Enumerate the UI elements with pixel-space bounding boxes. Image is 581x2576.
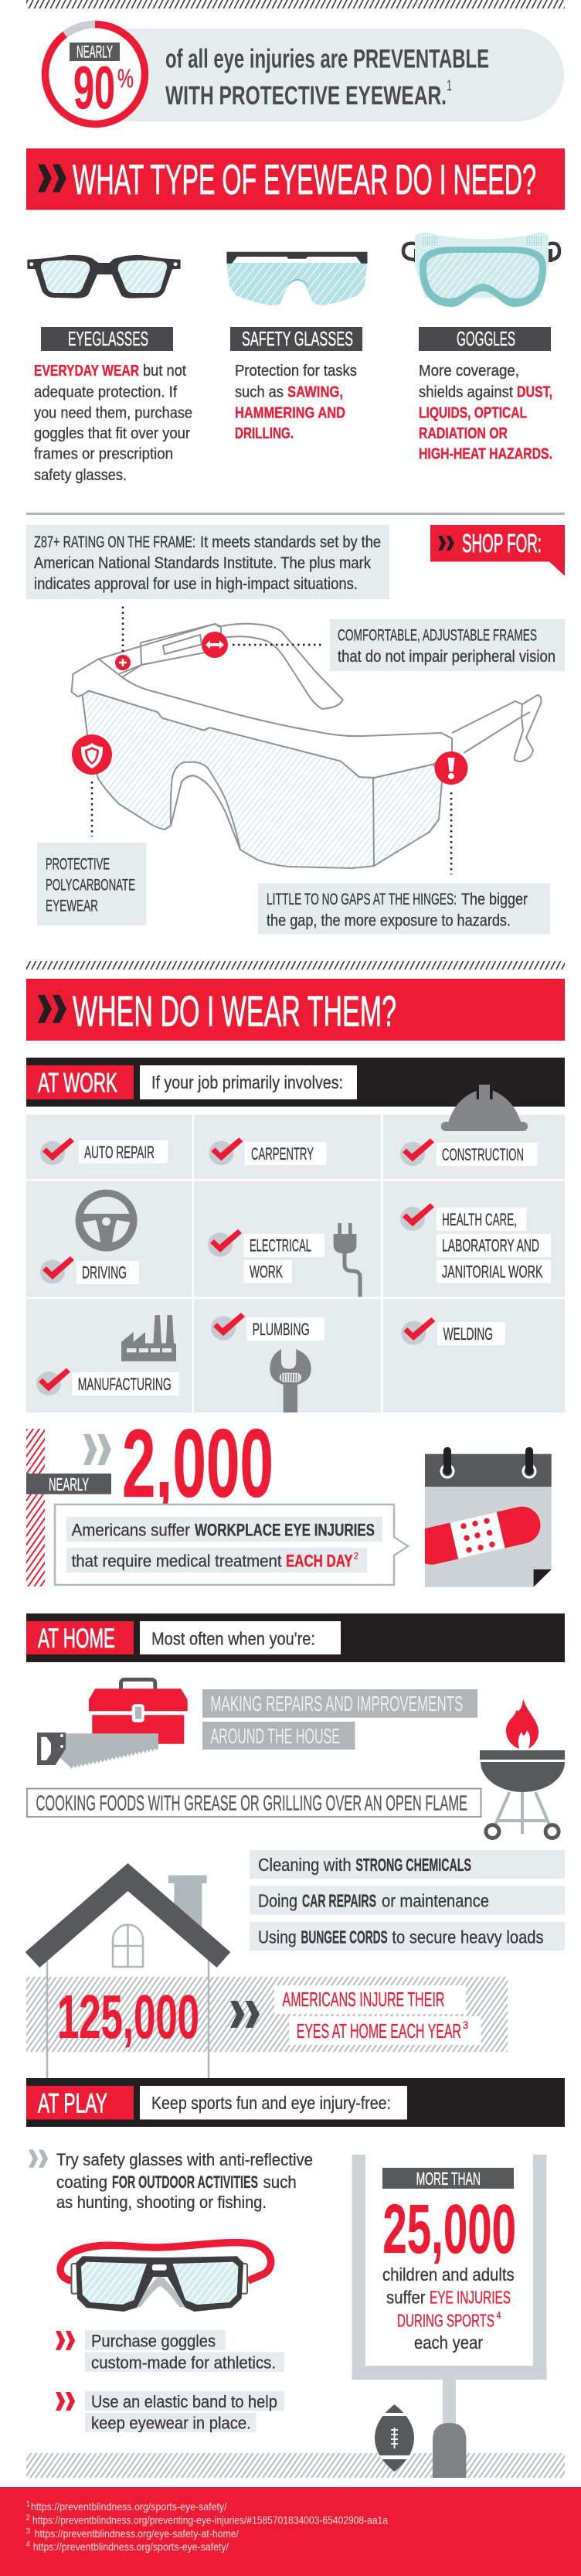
tip: anti-reflective glasses: such xyxy=(263,2172,297,2192)
icon: sports goggles xyxy=(60,2243,271,2312)
icon: house xyxy=(25,1863,230,2078)
more than tag: MORE THAN xyxy=(416,2169,481,2189)
item: manufacturing: MANUFACTURING xyxy=(78,1375,172,1394)
arm slot xyxy=(99,624,215,677)
item: driving xyxy=(40,1256,139,1284)
footer: sources: https://preventblindness.org/sports-eye-safety/ xyxy=(33,2540,229,2553)
callout: Z87+ rating: Z87+ RATING ON THE FRAME: xyxy=(34,533,195,551)
bar: at home: AT HOME xyxy=(38,1624,115,1654)
tip: elastic band xyxy=(56,2391,284,2432)
item: plumbing xyxy=(211,1313,324,1341)
description xyxy=(34,363,192,484)
label: EYEGLASSES xyxy=(68,327,148,350)
description: frames or prescription xyxy=(34,445,173,462)
nearly tag xyxy=(26,1474,111,1494)
red chevrons xyxy=(56,2331,75,2350)
description: but not xyxy=(143,363,186,380)
grey chevrons xyxy=(83,1434,111,1465)
stat band: 125,000: EYES AT HOME EACH YEAR xyxy=(297,2019,461,2043)
task list: chemicals, car repairs, bungee cords: Using xyxy=(258,1927,297,1947)
diagram: safety glasses anatomy xyxy=(72,606,541,874)
description: Protection for tasks xyxy=(235,363,357,380)
icon: alert marker xyxy=(434,751,468,785)
callout: Z87+ rating: American National Standards Institute. The plus mark xyxy=(34,554,371,572)
stat panel: nearly 2,000 xyxy=(26,1429,552,1587)
90 percent figure: 90 xyxy=(73,53,115,121)
footer: sources xyxy=(0,2487,581,2576)
description: HAMMERING AND xyxy=(235,405,345,422)
tip: anti-reflective glasses: coating xyxy=(56,2172,107,2192)
label xyxy=(419,327,551,351)
item: electrical work: ELECTRICAL xyxy=(250,1236,311,1256)
callout: polycarbonate: EYEWEAR xyxy=(46,897,98,915)
item: welding xyxy=(401,1317,505,1345)
125,000 figure: 125,000 xyxy=(57,1982,199,2051)
icon: plus marker xyxy=(115,655,131,670)
icon: steering wheel xyxy=(76,1190,138,1252)
grid: at work occupations xyxy=(26,1085,565,1412)
task list: chemicals, car repairs, bungee cords xyxy=(250,1850,565,1951)
item: electrical work: WORK xyxy=(250,1262,283,1282)
description: DUST, xyxy=(517,383,552,400)
footer: sources: 3 xyxy=(26,2527,31,2536)
description xyxy=(419,363,552,462)
column: eyeglasses xyxy=(34,327,192,484)
task list: chemicals, car repairs, bungee cords: Doing xyxy=(258,1891,297,1911)
speech callout xyxy=(55,1504,408,1585)
callout: comfortable frames xyxy=(330,619,565,671)
column: safety glasses xyxy=(230,327,362,442)
task list: chemicals, car repairs, bungee cords: to secure heavy loads xyxy=(392,1927,544,1947)
bar: at home xyxy=(26,1613,565,1662)
lens xyxy=(82,691,442,868)
bar: at play xyxy=(26,2078,565,2127)
item: carpentry: CARPENTRY xyxy=(251,1144,314,1164)
icon: plug xyxy=(334,1223,360,1297)
tip: anti-reflective glasses: as hunting, shooting or fishing. xyxy=(56,2193,267,2212)
tip: elastic band: Use an elastic band to help xyxy=(91,2392,277,2411)
red hatch strip xyxy=(26,1429,45,1586)
footer: sources: https://preventblindness.org/eye-safety-at-home/ xyxy=(35,2527,239,2540)
description: goggles that fit over your xyxy=(34,425,190,442)
speech callout: 2 xyxy=(354,1551,358,1562)
description: RADIATION OR xyxy=(419,425,508,442)
label: GOGGLES xyxy=(457,327,515,350)
description: safety glasses. xyxy=(34,467,127,484)
stat description: children and adults xyxy=(382,2264,515,2285)
tip: anti-reflective glasses: FOR OUTDOOR ACTIVITIES xyxy=(112,2172,258,2192)
chevrons xyxy=(38,164,66,192)
footer: sources: 1 xyxy=(26,2500,31,2509)
task list: chemicals, car repairs, bungee cords: STRONG CHEMICALS xyxy=(355,1855,471,1875)
callout: hinges xyxy=(258,883,550,934)
item: auto repair xyxy=(40,1137,168,1165)
speech callout: EACH DAY xyxy=(286,1552,353,1571)
bar: at work: AT WORK xyxy=(38,1068,117,1098)
goal post xyxy=(352,2155,546,2426)
item: plumbing: PLUMBING xyxy=(253,1320,310,1339)
icon: calendar with bandage xyxy=(425,1447,552,1587)
tip: anti-reflective glasses: Try safety glasses with anti-reflective xyxy=(56,2150,313,2169)
stat band: 125,000: 3 xyxy=(463,2019,468,2031)
description: LIQUIDS, OPTICAL xyxy=(419,405,527,422)
bar: at home: Most often when you're: xyxy=(151,1629,315,1649)
task list: chemicals, car repairs, bungee cords: BUNGEE CORDS xyxy=(301,1927,388,1947)
description xyxy=(235,363,357,442)
top hatch divider xyxy=(26,0,565,9)
icon: eyeglasses xyxy=(27,255,181,298)
section banner: what type of eyewear xyxy=(26,148,565,210)
stat description: 4 xyxy=(496,2309,501,2321)
task list: chemicals, car repairs, bungee cords: or maintenance xyxy=(382,1891,489,1911)
callout: polycarbonate: POLYCARBONATE xyxy=(46,876,135,894)
label: SAFETY GLASSES xyxy=(242,327,353,350)
icon: shield marker xyxy=(72,734,112,775)
callout: Z87+ rating: indicates approval for use in high-impact situations. xyxy=(34,575,358,593)
icon: wrench xyxy=(270,1349,311,1412)
task: repairs: AROUND THE HOUSE xyxy=(210,1724,340,1748)
callout: hinges: The bigger xyxy=(461,891,528,908)
shop for flag xyxy=(430,525,565,576)
task: repairs xyxy=(202,1689,477,1750)
item: driving: DRIVING xyxy=(82,1263,127,1283)
callout: Z87+ rating xyxy=(26,525,389,599)
progress ring xyxy=(45,24,145,124)
tip: elastic band: keep eyewear in place. xyxy=(91,2414,251,2432)
item: construction: CONSTRUCTION xyxy=(442,1145,524,1164)
description: DRILLING. xyxy=(235,425,294,442)
footer: sources: https://preventblindness.org/sports-eye-safety/ xyxy=(31,2500,227,2513)
bar: at work: If your job primarily involves: xyxy=(151,1072,343,1092)
tip: custom goggles xyxy=(56,2330,284,2372)
tip: custom goggles: Purchase goggles xyxy=(91,2331,216,2350)
stat band: 125,000: AMERICANS INJURE THEIR xyxy=(283,1988,445,2011)
grey chevrons xyxy=(29,2149,48,2168)
2,000 figure: 2,000 xyxy=(122,1410,274,1518)
flame xyxy=(506,1699,539,1749)
bar: at play: Keep sports fun and eye injury-free: xyxy=(151,2093,391,2113)
footer: sources: 2 xyxy=(26,2514,31,2522)
far temple arm xyxy=(452,695,541,762)
icon: grill with flame xyxy=(480,1699,565,1838)
top frame xyxy=(72,624,452,778)
description: such as xyxy=(235,383,284,400)
bar: at play: AT PLAY xyxy=(38,2089,107,2118)
red chevrons xyxy=(56,2392,75,2411)
item: welding: WELDING xyxy=(443,1324,493,1344)
callout: hinges: the gap, the more exposure to hazards. xyxy=(267,912,511,929)
footer: sources: 4 xyxy=(26,2540,31,2549)
column: goggles xyxy=(419,327,552,462)
nearly tag: NEARLY xyxy=(76,42,113,62)
speech callout: Americans suffer xyxy=(72,1521,190,1540)
icon: goggles xyxy=(403,232,559,307)
ground hatch xyxy=(26,2453,565,2478)
preventable statement: WITH PROTECTIVE EYEWEAR. xyxy=(165,81,447,111)
90 percent figure: % xyxy=(117,64,134,94)
icon: saw xyxy=(37,1733,158,1769)
nose piece xyxy=(171,762,240,850)
grid cells xyxy=(26,1115,565,1412)
item: carpentry xyxy=(209,1137,326,1165)
speech callout: that require medical treatment xyxy=(72,1552,282,1571)
task list: chemicals, car repairs, bungee cords: CAR REPAIRS xyxy=(302,1891,376,1911)
label xyxy=(230,327,362,351)
item: manufacturing xyxy=(36,1368,179,1395)
lens divider xyxy=(373,778,374,866)
description: SAWING, xyxy=(287,383,343,400)
chevrons xyxy=(438,536,454,550)
icon: adjust arrows marker xyxy=(202,632,228,658)
stat panel: nearly 90 percent xyxy=(45,24,564,124)
near temple arm xyxy=(215,624,343,709)
chevrons xyxy=(38,995,66,1023)
label xyxy=(41,327,173,351)
stat description: each year xyxy=(414,2332,483,2353)
description: you need them, purchase xyxy=(34,405,192,422)
grey pill background xyxy=(116,29,564,121)
description: EVERYDAY WEAR xyxy=(34,363,139,380)
stat description: DURING SPORTS xyxy=(397,2311,494,2331)
description: shields against xyxy=(419,383,513,400)
description: More coverage, xyxy=(419,363,519,380)
section banner: when do I wear them xyxy=(26,979,565,1041)
stat description xyxy=(382,2264,515,2353)
icon: toolbox xyxy=(89,1679,188,1744)
bar: at work xyxy=(26,1058,565,1107)
more than tag xyxy=(382,2168,514,2189)
icon: hard hat xyxy=(441,1085,528,1131)
stat band: 125,000 xyxy=(26,1977,508,2052)
item: health care, laboratory and janitorial work: HEALTH CARE, xyxy=(442,1210,517,1229)
callout: polycarbonate xyxy=(37,843,147,925)
callout: polycarbonate: PROTECTIVE xyxy=(46,855,110,874)
nearly tag xyxy=(70,42,120,62)
callout: Z87+ rating: It meets standards set by the xyxy=(200,533,381,551)
tip: custom goggles: custom-made for athletics. xyxy=(91,2353,276,2372)
preventable statement: 1 xyxy=(447,78,452,94)
item: construction xyxy=(400,1138,538,1166)
stat description: suffer xyxy=(386,2288,426,2308)
leader lines xyxy=(92,606,451,874)
chevrons xyxy=(230,2001,260,2028)
task list: chemicals, car repairs, bungee cords: Cleaning with xyxy=(258,1855,352,1875)
nearly tag: NEARLY xyxy=(49,1474,89,1494)
footer: sources: https://preventblindness.org/preventing-eye-injuries/#1585701834003-65402908-aa1a xyxy=(32,2514,388,2527)
icon: safety glasses xyxy=(226,252,368,305)
item: electrical work xyxy=(208,1229,324,1283)
preventable statement xyxy=(165,45,489,111)
speech callout: WORKPLACE EYE INJURIES xyxy=(195,1521,375,1540)
callout: comfortable frames: that do not impair peripheral vision xyxy=(338,648,556,666)
callout: hinges: LITTLE TO NO GAPS AT THE HINGES: xyxy=(267,891,457,908)
tip: anti-reflective glasses xyxy=(29,2149,313,2212)
icon: football xyxy=(375,2404,414,2472)
item: auto repair: AUTO REPAIR xyxy=(84,1143,155,1162)
description: adequate protection. If xyxy=(34,383,177,400)
icon: factory xyxy=(121,1315,176,1361)
item: health care, laboratory and janitorial work xyxy=(400,1203,551,1283)
goal post with stat: 25,000 xyxy=(352,2155,546,2478)
stat description: EYE INJURIES xyxy=(430,2288,511,2308)
